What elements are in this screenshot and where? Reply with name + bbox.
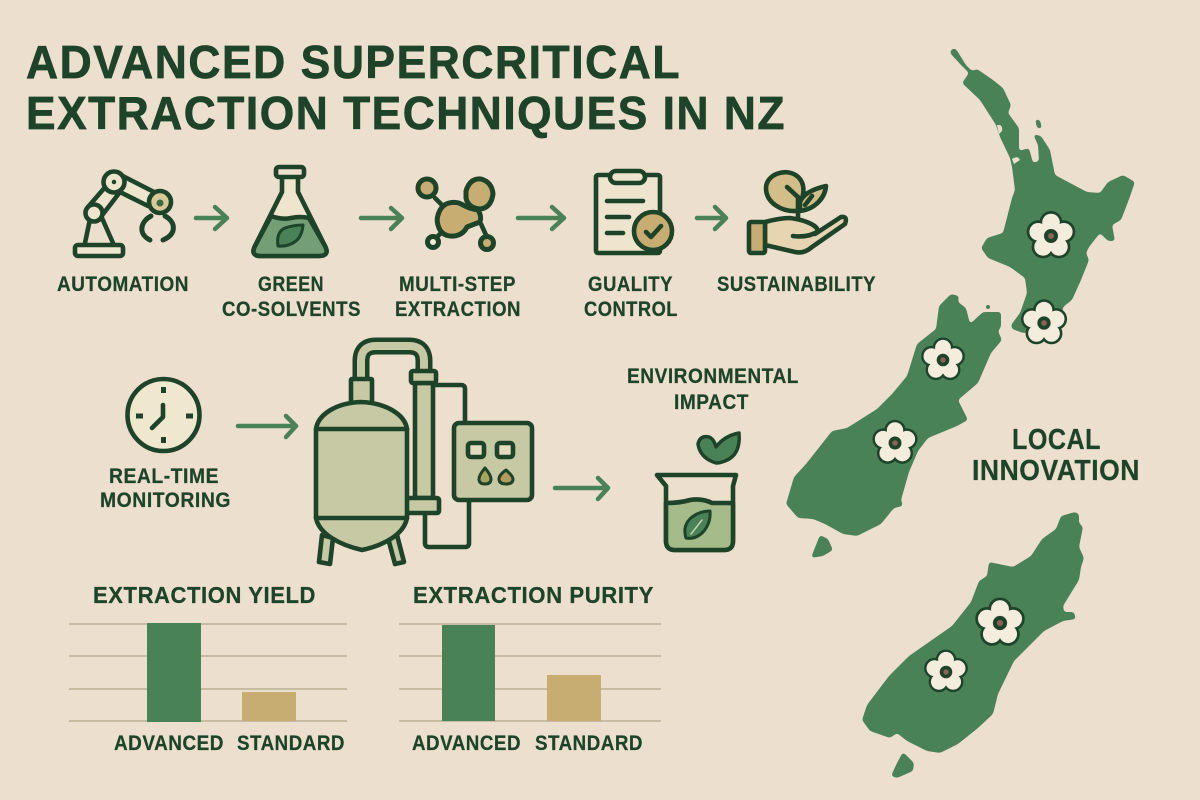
- label: multi-step extraction: MULTI-STEP: [399, 272, 516, 296]
- label: quality control: GUALITY: [588, 272, 673, 296]
- label: real-time monitoring: [100, 464, 231, 512]
- icon: flask with leaf: [253, 167, 327, 256]
- label: standard: STANDARD: [237, 731, 345, 755]
- label: local innovation: [972, 424, 1140, 487]
- label: advanced: ADVANCED: [412, 731, 521, 755]
- map: north island: [950, 48, 1135, 344]
- label: multi-step extraction: EXTRACTION: [395, 297, 521, 321]
- label: green co-solvents: CO-SOLVENTS: [222, 297, 361, 321]
- flower marker: [975, 598, 1025, 646]
- chart title: extraction yield: EXTRACTION YIELD: [93, 582, 316, 608]
- icon: extraction vessel with control box: [316, 346, 532, 564]
- icon: molecule: [418, 179, 494, 250]
- map: south island (lower): [862, 512, 1084, 778]
- label: real-time monitoring: REAL-TIME: [109, 464, 219, 488]
- title: ADVANCED SUPERCRITICAL: [26, 36, 681, 88]
- bar: advanced purity: [442, 625, 495, 721]
- label: quality control: CONTROL: [584, 297, 678, 321]
- chart title: extraction purity: EXTRACTION PURITY: [413, 582, 654, 608]
- label: real-time monitoring: MONITORING: [100, 488, 231, 512]
- flower marker: [1027, 211, 1075, 258]
- arrow: quality to sustainability: [697, 207, 726, 229]
- icon: beaker with leaf: [657, 433, 739, 550]
- bar: standard yield: [242, 692, 296, 721]
- label: local innovation: INNOVATION: [972, 455, 1140, 487]
- label: quality control: [584, 272, 678, 321]
- arrow: multi-step to quality: [518, 207, 564, 229]
- bar: standard purity: [547, 675, 601, 721]
- arrow: automation to co-solvents: [196, 207, 227, 229]
- icon: hand holding sprout: [749, 172, 846, 253]
- label: automation: AUTOMATION: [57, 272, 189, 296]
- label: advanced: ADVANCED: [114, 731, 224, 755]
- arrow: co-solvents to multi-step: [361, 208, 402, 229]
- label: standard: STANDARD: [535, 731, 643, 755]
- map: south island (upper): [786, 294, 1002, 558]
- title: EXTRACTION TECHNIQUES IN NZ: [26, 87, 786, 139]
- flower marker: [872, 420, 918, 464]
- icon: robot arm automation: [75, 172, 173, 256]
- label: sustainability: SUSTAINABILITY: [717, 272, 876, 296]
- flower marker: [921, 338, 965, 380]
- chart: extraction purity: [399, 582, 661, 755]
- label: environmental impact: IMPACT: [674, 390, 749, 414]
- arrow: monitoring to vessel: [238, 416, 296, 437]
- label: local innovation: LOCAL: [1012, 424, 1101, 456]
- label: environmental impact: [627, 364, 799, 414]
- label: multi-step extraction: [395, 272, 521, 321]
- title: [26, 36, 786, 139]
- flower marker: [924, 650, 968, 692]
- label: green co-solvents: GREEN: [258, 272, 324, 296]
- icon: clipboard with check: [596, 171, 672, 253]
- label: environmental impact: ENVIRONMENTAL: [627, 364, 799, 388]
- icon: clock: [128, 379, 200, 451]
- arrow: vessel to impact: [555, 478, 608, 499]
- chart: extraction yield: [69, 582, 347, 755]
- flower marker: [1021, 299, 1067, 344]
- bar: advanced yield: [147, 623, 201, 722]
- label: green co-solvents: [222, 272, 361, 321]
